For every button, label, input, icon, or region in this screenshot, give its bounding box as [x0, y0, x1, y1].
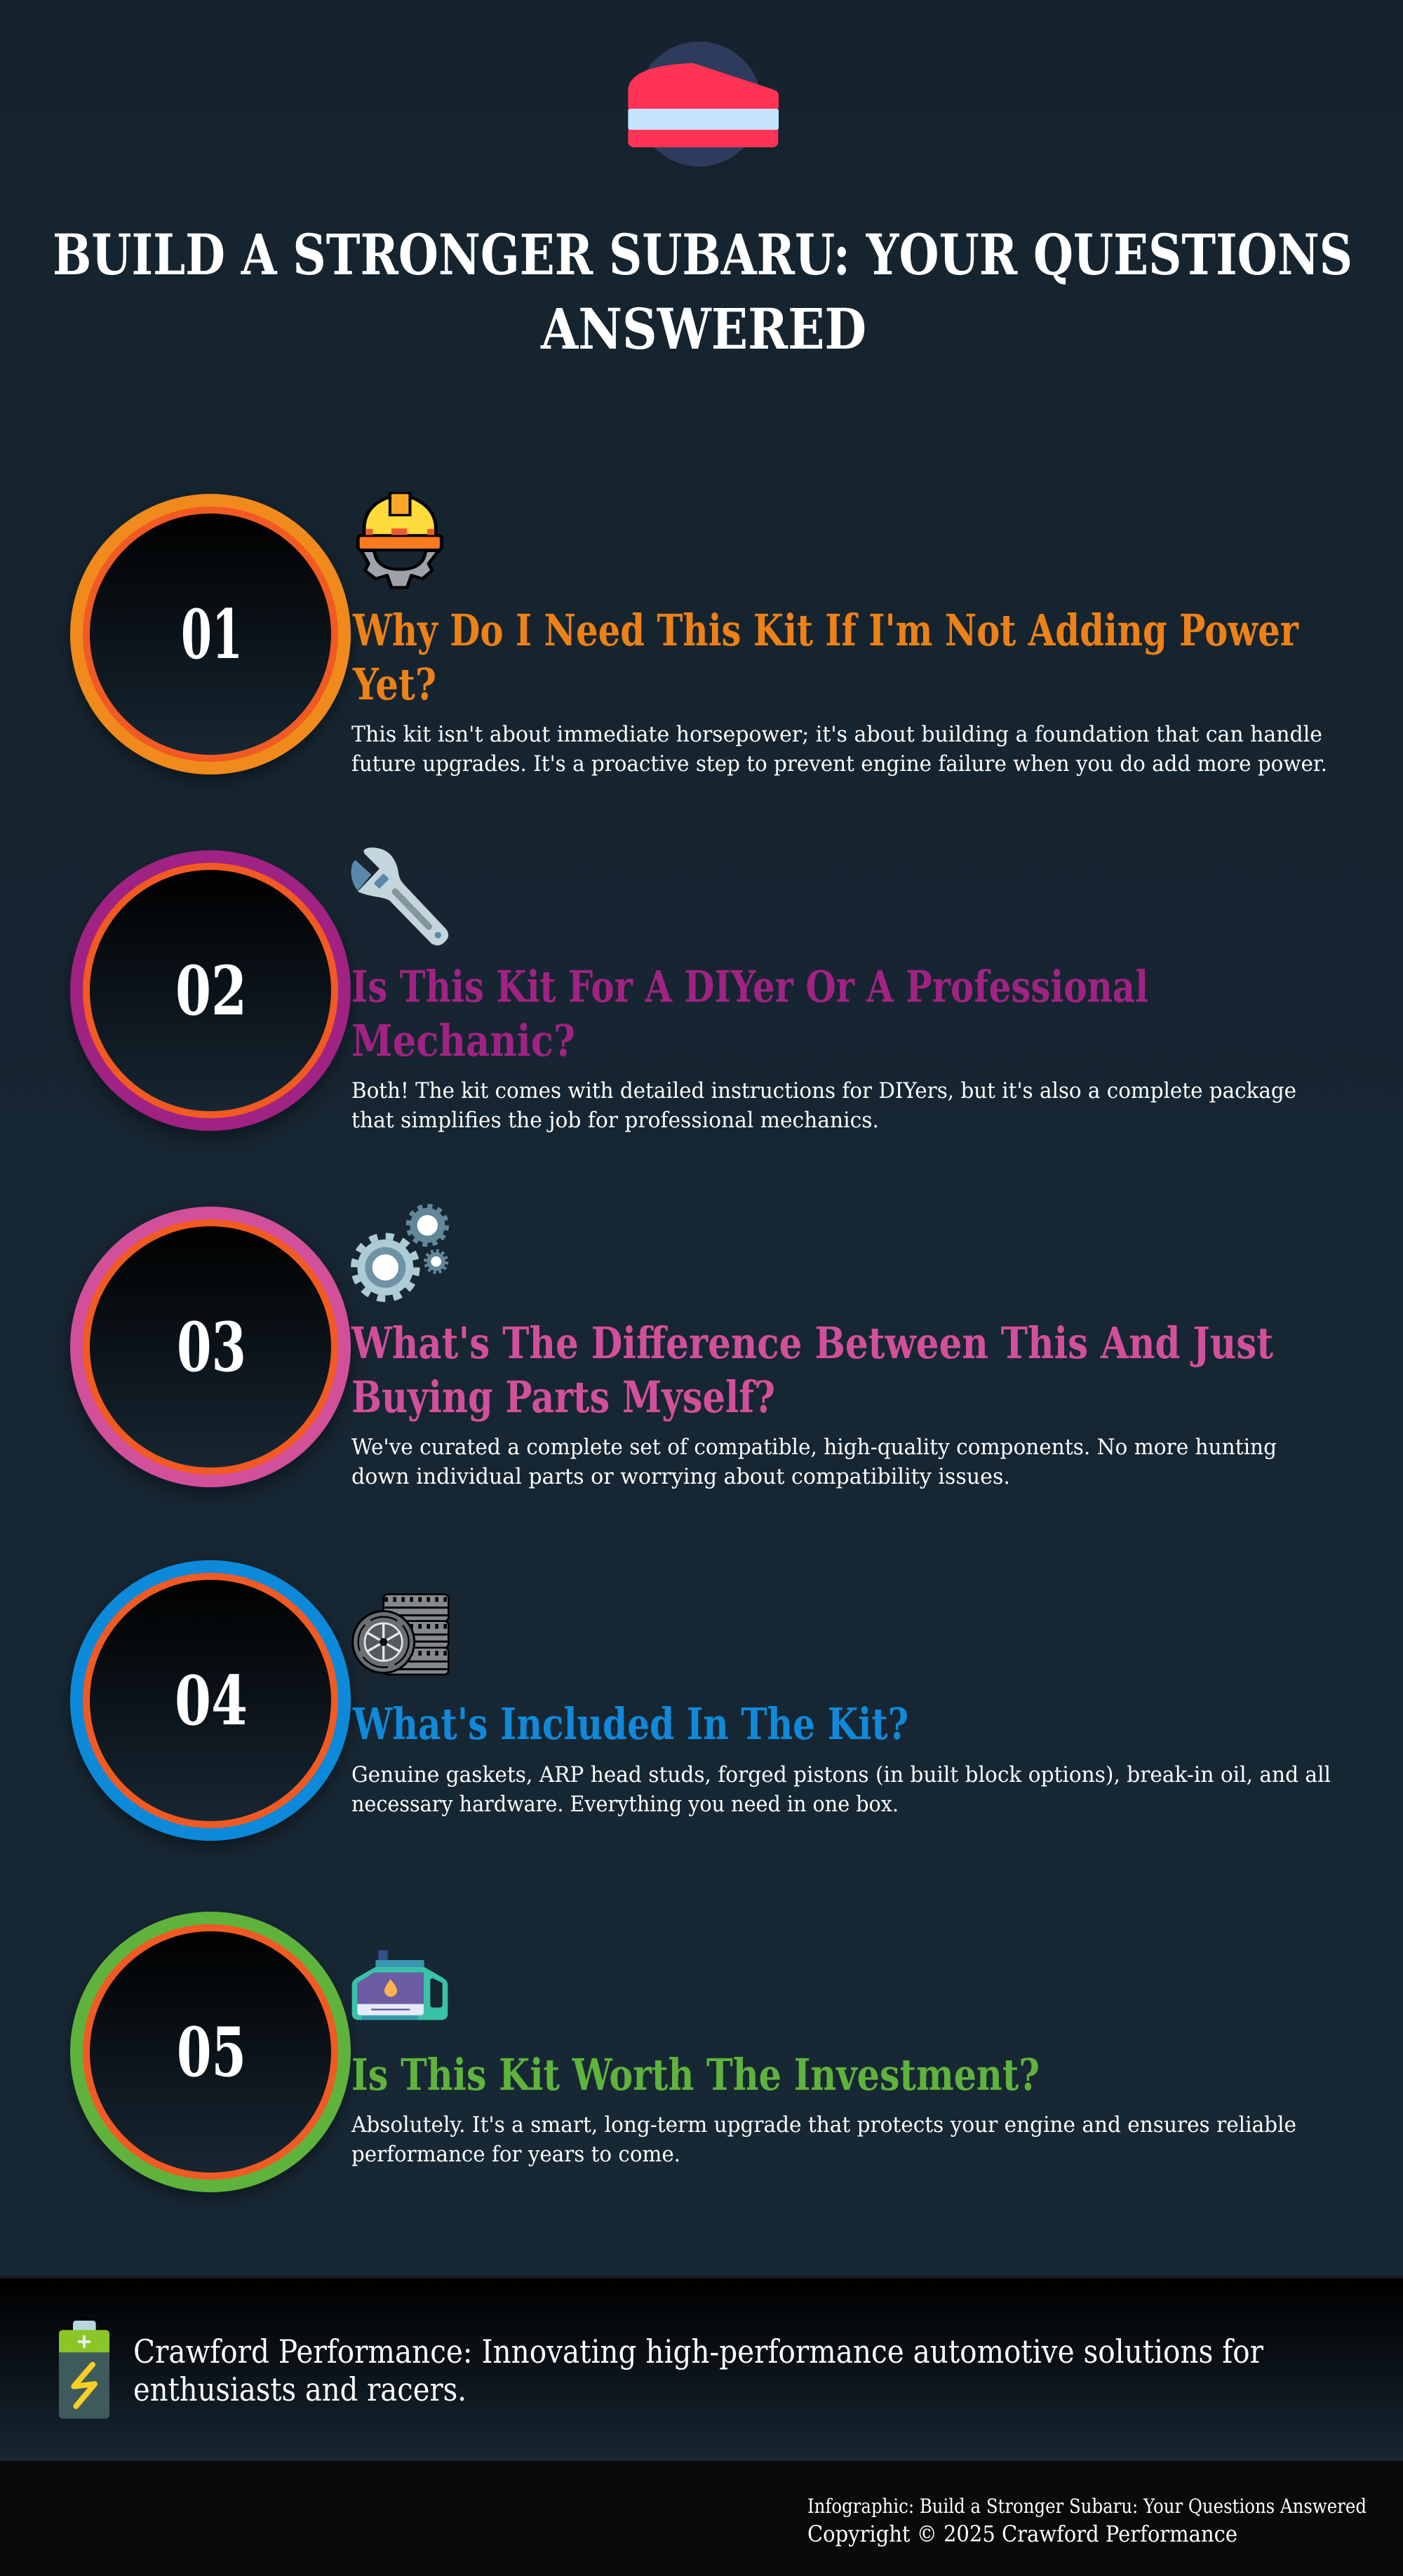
company statement: enthusiasts and racers.: [133, 2370, 466, 2408]
icon: hard hat and gear: [358, 493, 441, 587]
panel: question 02: [70, 847, 1296, 1133]
heading 02: Is This Kit For A DIYer Or A Professional: [351, 961, 1148, 1012]
panel: question 03: [70, 1206, 1277, 1489]
footer credits: [807, 2495, 1367, 2547]
number badge 04: [70, 1560, 351, 1841]
title: [53, 222, 1352, 362]
number badge 03: 03: [177, 1308, 246, 1387]
number badge 05: [70, 1912, 351, 2192]
icon: adjustable wrench: [351, 847, 448, 946]
heading 02: Mechanic?: [351, 1015, 575, 1066]
body text 03: [351, 1435, 1277, 1489]
body text 02: [351, 1078, 1296, 1133]
panel: question 04: [70, 1560, 1331, 1841]
number badge 02: [70, 850, 351, 1131]
icon: three gears: [354, 1206, 447, 1299]
body text 01: future upgrades. It's a proactive step to prevent engine failure when you do add more power.: [351, 751, 1327, 777]
panel: footer: [0, 2461, 1403, 2576]
panel: question 05: [70, 1912, 1296, 2192]
body text 02: that simplifies the job for professional mechanics.: [351, 1108, 879, 1133]
number badge 05: 05: [177, 2013, 246, 2092]
company statement: [133, 2333, 1263, 2408]
company statement: Crawford Performance: Innovating high-performance automotive solutions for: [133, 2333, 1263, 2370]
number badge 01: [70, 494, 351, 774]
icon: stack of tyres: [353, 1595, 448, 1675]
number badge 02: 02: [175, 951, 247, 1031]
heading 01: [352, 605, 1299, 710]
footer credits: Copyright © 2025 Crawford Performance: [807, 2521, 1237, 2547]
body text 01: [351, 722, 1327, 777]
heading 02: [351, 961, 1148, 1066]
icon: engine oil can: [352, 1950, 448, 2020]
body text 04: [351, 1762, 1331, 1817]
heading 03: Buying Parts Myself?: [351, 1371, 775, 1423]
heading 05: Is This Kit Worth The Investment?: [351, 2049, 1040, 2100]
body text 05: performance for years to come.: [351, 2142, 680, 2167]
heading 04: What's Included In The Kit?: [352, 1698, 908, 1750]
number badge 03: [70, 1207, 351, 1487]
body text 03: down individual parts or worrying about compatibility issues.: [351, 1464, 1010, 1489]
title: ANSWERED: [540, 296, 866, 362]
number badge 01: 01: [181, 595, 243, 674]
body text 04: Genuine gaskets, ARP head studs, forged pistons (in built block options), break-in oil, and all: [351, 1762, 1331, 1787]
number badge 04: 04: [175, 1661, 248, 1740]
body text 03: We've curated a complete set of compatible, high-quality components. No more hunting: [351, 1435, 1277, 1460]
body text 05: Absolutely. It's a smart, long-term upgrade that protects your engine and ensures reliable: [351, 2112, 1296, 2138]
panel: company band: [0, 2276, 1403, 2461]
body text 02: Both! The kit comes with detailed instructions for DIYers, but it's also a complete package: [351, 1078, 1296, 1103]
icon: battery: [59, 2321, 109, 2419]
panel: question 01: [70, 493, 1327, 777]
heading 01: Yet?: [352, 659, 436, 710]
icon: cake slice logo: [628, 41, 779, 166]
body text 04: necessary hardware. Everything you need in one box.: [351, 1792, 899, 1817]
body text 05: [351, 2112, 1296, 2167]
heading 03: [351, 1317, 1273, 1423]
body text 01: This kit isn't about immediate horsepower; it's about building a foundation that can handle: [351, 722, 1322, 747]
